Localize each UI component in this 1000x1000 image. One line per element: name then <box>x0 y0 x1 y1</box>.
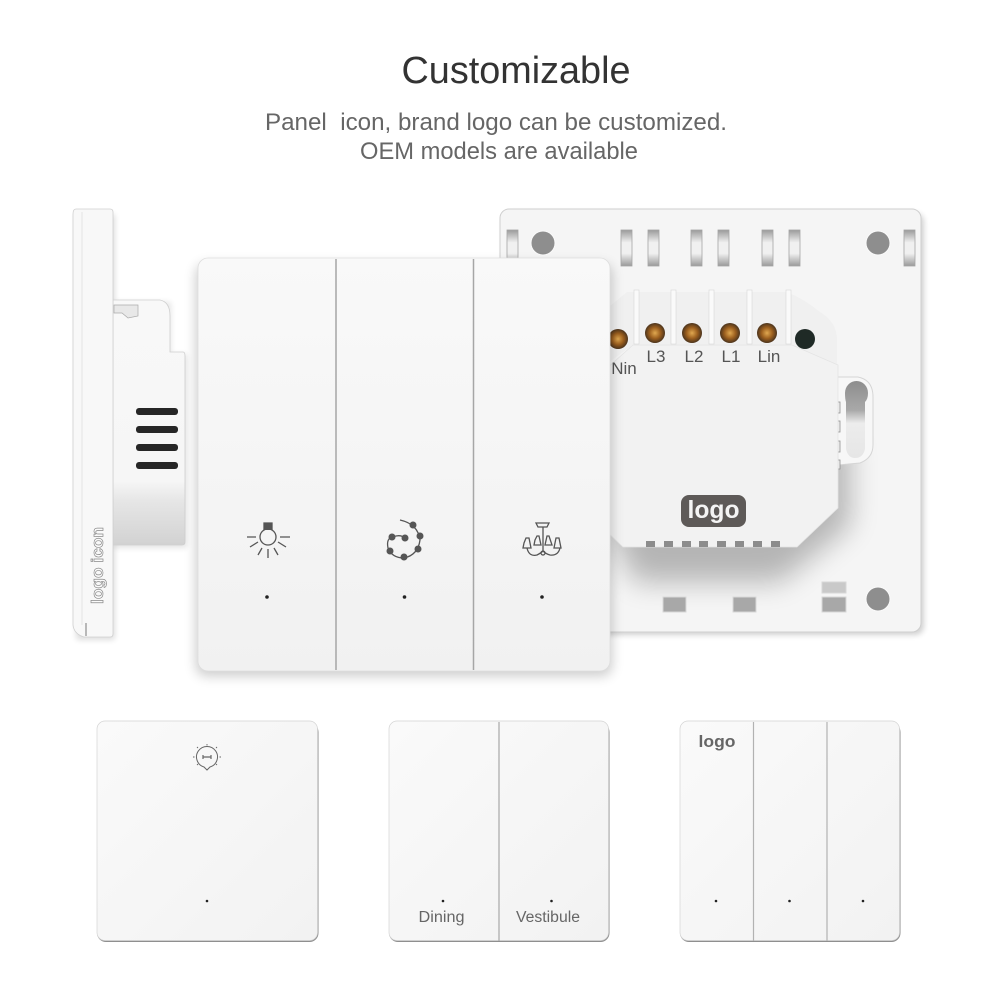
option: single-gang panel with icon <box>97 721 318 942</box>
brass terminals <box>608 323 777 349</box>
terminal block <box>605 290 837 370</box>
side view of switch <box>73 209 187 640</box>
panel body <box>198 258 610 671</box>
indicator dots <box>442 900 553 902</box>
side view housing <box>113 300 185 545</box>
indicator dots <box>715 900 864 902</box>
icon: spiral of beads <box>386 520 424 560</box>
screw holes <box>531 231 890 611</box>
terminal labels <box>611 347 780 378</box>
panel body <box>389 721 608 940</box>
module shadow <box>610 440 850 582</box>
icon: M bulb <box>193 744 221 770</box>
panel body <box>680 721 900 940</box>
ventilation slots <box>136 408 178 469</box>
icon: light bulb <box>247 523 290 558</box>
top mounting slots <box>507 230 915 266</box>
side plate <box>73 209 113 637</box>
plate body <box>500 209 921 632</box>
button dividers <box>336 259 474 670</box>
subtitle text block <box>265 109 727 165</box>
panel shadow <box>196 264 612 676</box>
back plate <box>500 209 924 635</box>
bottom clips <box>663 582 846 612</box>
housing clip <box>114 305 138 318</box>
dark button <box>795 329 815 349</box>
side view shadow <box>113 302 187 548</box>
title: Customizable <box>402 50 630 92</box>
button divider <box>498 722 500 941</box>
side logo text: logo icon <box>88 527 107 604</box>
label: Vestibule: Vestibule <box>516 909 580 926</box>
panel shadow <box>389 723 610 942</box>
panel body <box>97 721 318 940</box>
button dividers <box>754 722 827 941</box>
subtitle text block: OEM models are available <box>360 138 638 165</box>
option: two-gang panel with text labels <box>389 721 610 942</box>
subtitle text block: Panel icon, brand logo can be customized. <box>265 109 727 136</box>
module vent teeth <box>646 541 780 547</box>
terminal labels: Nin <box>611 359 637 378</box>
plate shadow <box>76 214 115 640</box>
icon: chandelier <box>523 523 561 555</box>
logo badge: logo <box>688 496 740 524</box>
terminal labels: L2 <box>685 347 703 366</box>
indicator dot <box>206 900 208 902</box>
option: three-gang panel with logo <box>680 721 900 942</box>
terminal labels: L3 <box>647 347 665 366</box>
panel shadow <box>97 723 318 942</box>
label: Dining: Dining <box>418 909 464 926</box>
panel shadow <box>680 723 900 942</box>
panel logo: logo <box>698 732 736 751</box>
keyhole mount <box>833 377 873 469</box>
indicator dots <box>265 595 544 599</box>
terminal labels: L1 <box>722 347 740 366</box>
terminal labels: Lin <box>758 347 780 366</box>
back plate shadow <box>504 213 924 635</box>
module body <box>605 345 838 547</box>
main three-gang front panel <box>196 258 612 676</box>
